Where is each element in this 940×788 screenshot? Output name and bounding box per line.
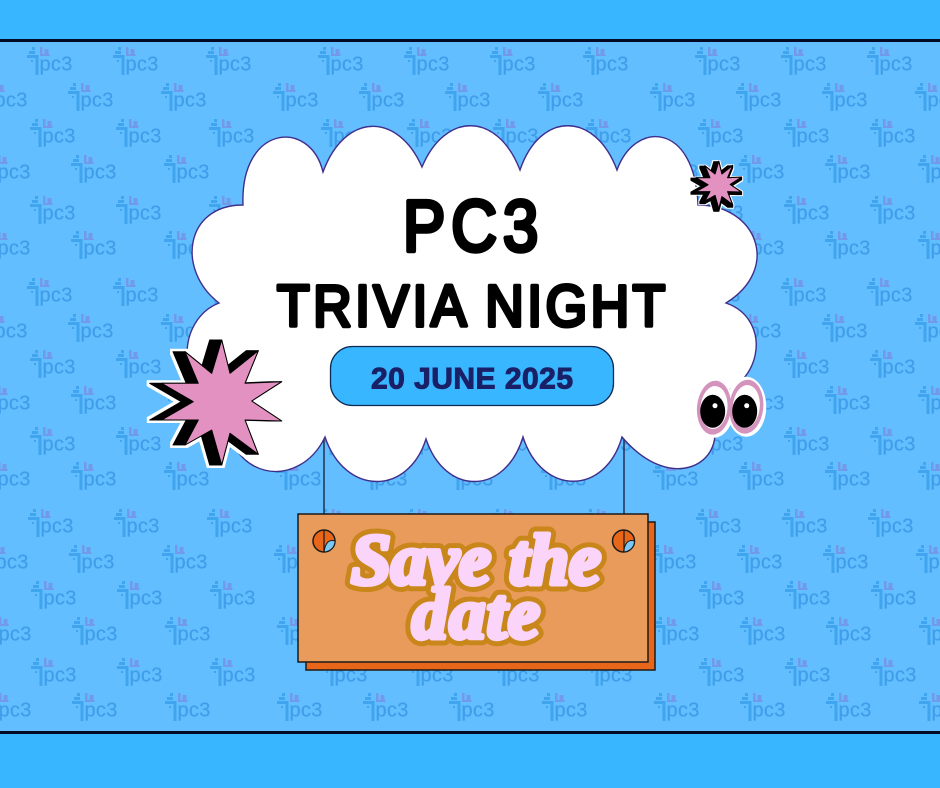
icon: small pink starburst — [696, 161, 742, 209]
string over ring — [324, 530, 624, 552]
sign board — [298, 514, 655, 670]
cloud panel — [187, 126, 757, 482]
date pill: 20 JUNE 2025 — [371, 362, 573, 396]
save the date text: date — [412, 574, 540, 654]
right hanging ring — [612, 530, 634, 552]
save the date outline text — [351, 520, 601, 654]
sign front panel — [298, 514, 648, 662]
icon: googly eyes — [694, 377, 766, 438]
save the date text: Save the — [351, 520, 601, 600]
title: Trivia Night: TRIVIA NIGHT — [277, 274, 669, 338]
sign back panel — [306, 522, 655, 670]
save the date outline text: date — [412, 574, 540, 654]
date pill — [330, 346, 614, 406]
left hanging ring — [313, 530, 335, 552]
sign strings — [324, 436, 624, 556]
save the date text — [351, 520, 601, 654]
icon: large pink starburst — [162, 340, 282, 465]
title: PC3: PC3 — [403, 187, 544, 267]
save the date outline text: Save the — [351, 520, 601, 600]
